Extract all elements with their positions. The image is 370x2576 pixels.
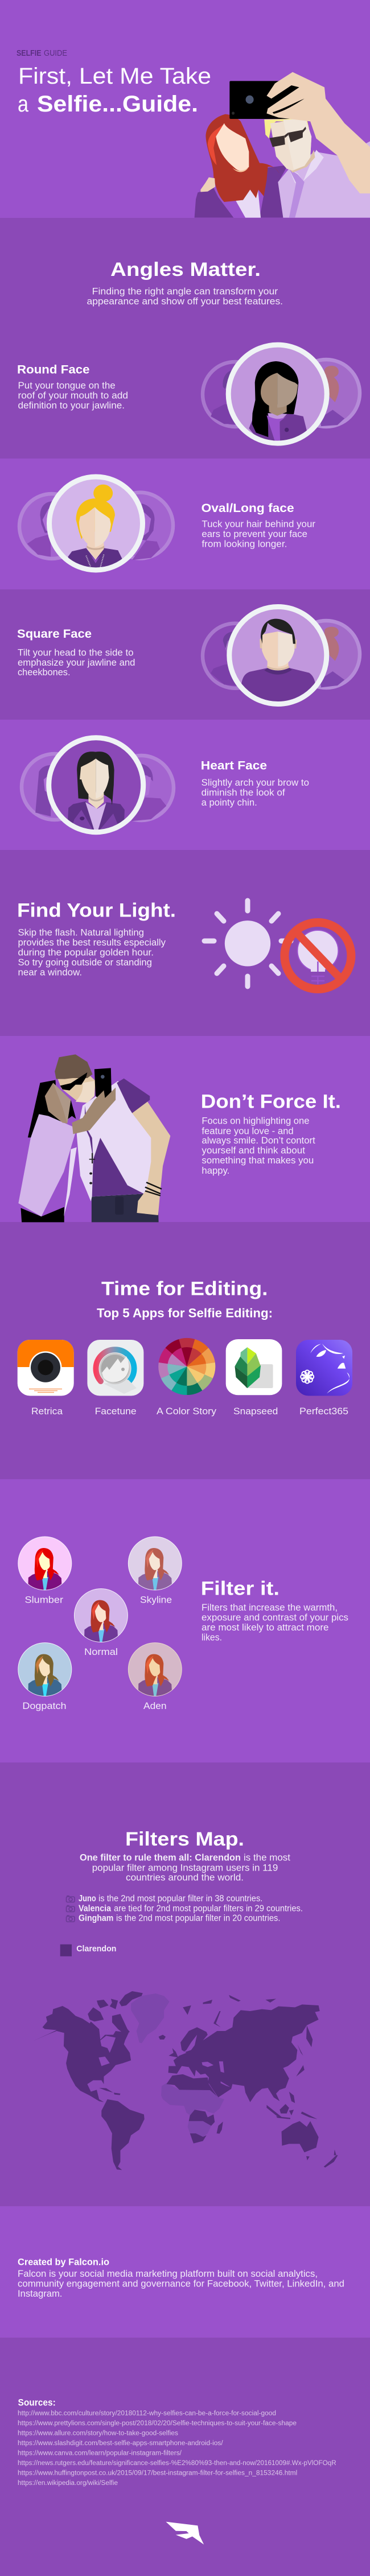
section background: find your light — [0, 850, 370, 1036]
section background: oval face — [0, 459, 370, 589]
hero title: First, Let Me Take — [18, 64, 211, 89]
text block: don't force it: happy. — [202, 1165, 229, 1176]
text block: square face — [17, 628, 135, 678]
text block: don't force it: something that makes you — [202, 1155, 314, 1166]
filter avatar: Slumber — [18, 1537, 72, 1590]
illustration: couple taking a selfie — [195, 72, 370, 218]
heading: filters map: Filters Map. — [125, 1828, 244, 1850]
list: runner-up filters: is the 2nd most popular filter in 20 countries. — [116, 1914, 280, 1923]
section background: square face — [0, 589, 370, 720]
heading: filter it: Filter it. — [201, 1578, 279, 1599]
subheading: top 5 apps: Top 5 Apps for Selfie Editing: — [97, 1306, 273, 1320]
text block: sources: https://www.huffingtonpost.co.uk/2015/09/17/best-instagram-filter-for-selfies_n_8153246.html — [18, 2470, 297, 2476]
text block: sources: https://en.wikipedia.org/wiki/Selfie — [18, 2480, 118, 2487]
text block: square face: emphasize your jawline and — [18, 657, 135, 668]
app label: A Color Story: A Color Story — [157, 1406, 217, 1417]
text block: square face: Tilt your head to the side to — [18, 647, 134, 658]
text block: sources — [18, 2397, 336, 2487]
app icon: Perfect365 — [296, 1340, 352, 1396]
section background: filters map — [0, 1762, 370, 2206]
text block: round face — [17, 363, 128, 411]
faded portrait: left — [203, 624, 268, 688]
text block: find your light — [18, 927, 166, 977]
hero eyebrow: GUIDE — [44, 49, 67, 58]
section background: hero — [0, 0, 370, 218]
text block: find your light: So try going outside or standing — [18, 957, 152, 968]
text block: filters map intro: One filter to rule them all: Clarendon — [80, 1852, 241, 1863]
intro text: angles matter: Finding the right angle can transform your — [92, 286, 278, 297]
text block: square face: Square Face — [17, 628, 92, 641]
text block: oval long face: Tuck your hair behind your — [202, 519, 315, 530]
text block: round face: roof of your mouth to add — [18, 390, 128, 401]
world map — [33, 1991, 338, 2170]
list: runner-up filters: Gingham — [79, 1914, 113, 1923]
text block: filter it: are most likely to attract more — [202, 1622, 329, 1633]
text block: credits: Instagram. — [18, 2289, 62, 2299]
hero eyebrow — [17, 49, 67, 58]
text block: filter it: exposure and contrast of your pics — [202, 1612, 348, 1623]
app label: Perfect365: Perfect365 — [299, 1406, 348, 1417]
text block: filters map intro: countries around the world. — [126, 1872, 244, 1883]
legend: Clarendon: Clarendon — [76, 1944, 116, 1954]
main portrait: man with dark hair — [229, 606, 327, 704]
filter label: Aden: Aden — [143, 1700, 167, 1711]
faded portrait: right — [109, 756, 174, 821]
filter label: Slumber: Slumber — [25, 1595, 63, 1605]
portrait group: heart face — [22, 738, 174, 832]
text block: sources: http://www.bbc.com/culture/story/20180112-why-selfies-can-be-a-force-for-social-good — [18, 2410, 276, 2417]
text block: credits: Falcon is your social media marketing platform built on social analytics, — [18, 2269, 318, 2279]
text block: oval long face: from looking longer. — [202, 538, 287, 550]
list: runner-up filters: Juno — [79, 1894, 96, 1904]
icon: crossed out flash bulb — [285, 923, 351, 989]
icon: camera — [66, 1906, 75, 1912]
filter label: Dogpatch: Dogpatch — [22, 1700, 67, 1711]
icon: camera — [66, 1916, 75, 1922]
section background: angles matter and round face — [0, 218, 370, 459]
hero title: a — [18, 92, 29, 117]
portrait group: square face — [203, 606, 360, 704]
text block: round face: definition to your jawline. — [18, 400, 125, 411]
icon: sun — [204, 901, 291, 986]
app icon: Facetune — [87, 1340, 143, 1396]
filter avatar: Normal — [74, 1588, 128, 1642]
text block: find your light: Skip the flash. Natural lighting — [18, 927, 144, 938]
text block: sources: https://www.allure.com/story/how-to-take-good-selfies — [18, 2430, 178, 2437]
faded portrait: left — [22, 754, 88, 820]
map: inland seas — [98, 2035, 230, 2087]
filter avatar: Dogpatch — [18, 1643, 72, 1696]
app icon: Retrica — [18, 1340, 74, 1396]
text block: oval long face: ears to prevent your face — [202, 529, 307, 539]
text block: don't force it: Focus on highlighting one — [202, 1116, 310, 1126]
list: runner-up filters: are tied for 2nd most popular filters in 29 countries. — [114, 1904, 303, 1913]
app label: Snapseed: Snapseed — [233, 1406, 278, 1417]
hero title: Selfie...Guide. — [37, 92, 198, 117]
text block: sources: https://news.rutgers.edu/feature/significance-selfies-%E2%80%93-then-and-now/20161009#.Wx-pVlOFOqR — [18, 2460, 336, 2467]
text block: find your light: near a window. — [18, 967, 82, 977]
list: runner-up filters: is the 2nd most popular filter in 38 countries. — [98, 1894, 262, 1904]
app icon: Snapseed — [226, 1339, 282, 1395]
text block: sources: https://www.slashdigit.com/best-selfie-apps-smartphone-android-ios/ — [18, 2440, 224, 2447]
app label: Retrica: Retrica — [31, 1406, 63, 1417]
section background: filter it — [0, 1479, 370, 1762]
text block: filters map intro: popular filter among Instagram users in 119 — [92, 1862, 278, 1873]
text block: don't force it: feature you love - and — [202, 1125, 294, 1136]
text block: filters map intro: is the most — [244, 1852, 290, 1863]
text block: don't force it: yourself and think about — [202, 1145, 305, 1156]
text block: sources: https://www.prettylions.com/single-post/2018/02/20/Selfie-techniques-to-suit-your-face-shape — [18, 2420, 297, 2427]
intro text: angles matter: appearance and show off your best features. — [87, 296, 283, 307]
legend: Clarendon — [60, 1944, 116, 1956]
faded portrait: right — [293, 360, 360, 427]
text block: heart face — [201, 759, 309, 808]
portrait group: round face — [203, 345, 360, 443]
text block: oval long face: Oval/Long face — [202, 502, 294, 515]
filter avatar: Skyline — [128, 1537, 182, 1590]
text block: filter it — [202, 1602, 348, 1642]
main portrait: woman with blonde bun — [49, 476, 143, 571]
portrait group: oval face — [19, 476, 173, 571]
text block: don't force it: always smile. Don’t contort — [202, 1135, 315, 1146]
text block: credits — [18, 2257, 344, 2299]
intro text: angles matter — [87, 286, 283, 307]
list: runner-up filters — [66, 1894, 303, 1923]
filter avatar: Aden — [128, 1643, 182, 1696]
text block: find your light: provides the best results especially — [18, 937, 166, 948]
section background: time for editing — [0, 1222, 370, 1479]
text block: find your light: during the popular golden hour. — [18, 947, 154, 957]
app label: Facetune: Facetune — [95, 1406, 137, 1417]
text block: heart face: Heart Face — [201, 759, 267, 773]
map: regions where Clarendon leads — [33, 1991, 338, 2170]
heading: find your light: Find Your Light. — [17, 900, 176, 922]
app icon: A Color Story wheel — [158, 1338, 216, 1396]
heading: don't force it: Don’t Force It. — [201, 1091, 341, 1113]
illustration: couple posing — [18, 1054, 170, 1222]
section background: sources — [0, 2338, 370, 2576]
icon: camera — [66, 1896, 75, 1902]
section background: don't force it — [0, 1036, 370, 1222]
map: regions with other top filters — [131, 1993, 224, 2137]
text block: sources: Sources: — [18, 2397, 56, 2408]
text block: don't force it — [202, 1116, 315, 1176]
text block: oval long face — [202, 502, 315, 550]
text block: heart face: Slightly arch your brow to — [202, 777, 309, 788]
text block: credits: community engagement and governance for Facebook, Twitter, LinkedIn, and — [18, 2278, 344, 2289]
text block: filter it: likes. — [202, 1632, 222, 1642]
text block: round face: Put your tongue on the — [18, 380, 116, 391]
section background: heart face — [0, 720, 370, 850]
logo: Falcon wing — [166, 2522, 204, 2545]
hero title — [18, 64, 211, 117]
text block: heart face: a pointy chin. — [202, 797, 257, 808]
main portrait: woman with black hair — [228, 345, 327, 443]
text block: square face: cheekbones. — [18, 667, 71, 678]
heading: time for editing: Time for Editing. — [101, 1278, 268, 1299]
filter label: Skyline: Skyline — [140, 1595, 172, 1605]
list: runner-up filters: Valencia — [79, 1904, 111, 1913]
text block: credits: Created by Falcon.io — [18, 2257, 109, 2267]
section background: credits — [0, 2206, 370, 2338]
faded portrait: right — [293, 621, 360, 688]
text block: filters map intro — [80, 1852, 290, 1883]
faded portrait: left — [19, 494, 84, 559]
main portrait: woman with straight dark hair — [49, 738, 143, 832]
hero eyebrow: SELFIE — [17, 49, 42, 58]
text block: round face: Round Face — [17, 363, 90, 377]
text block: sources: https://www.canva.com/learn/popular-instagram-filters/ — [18, 2450, 182, 2457]
text block: heart face: diminish the look of — [202, 787, 285, 798]
faded portrait: right — [107, 493, 173, 560]
heading: angles matter: Angles Matter. — [110, 259, 261, 280]
filter label: Normal: Normal — [84, 1646, 118, 1657]
text block: filter it: Filters that increase the warmth, — [202, 1602, 338, 1613]
faded portrait: left — [203, 362, 268, 427]
